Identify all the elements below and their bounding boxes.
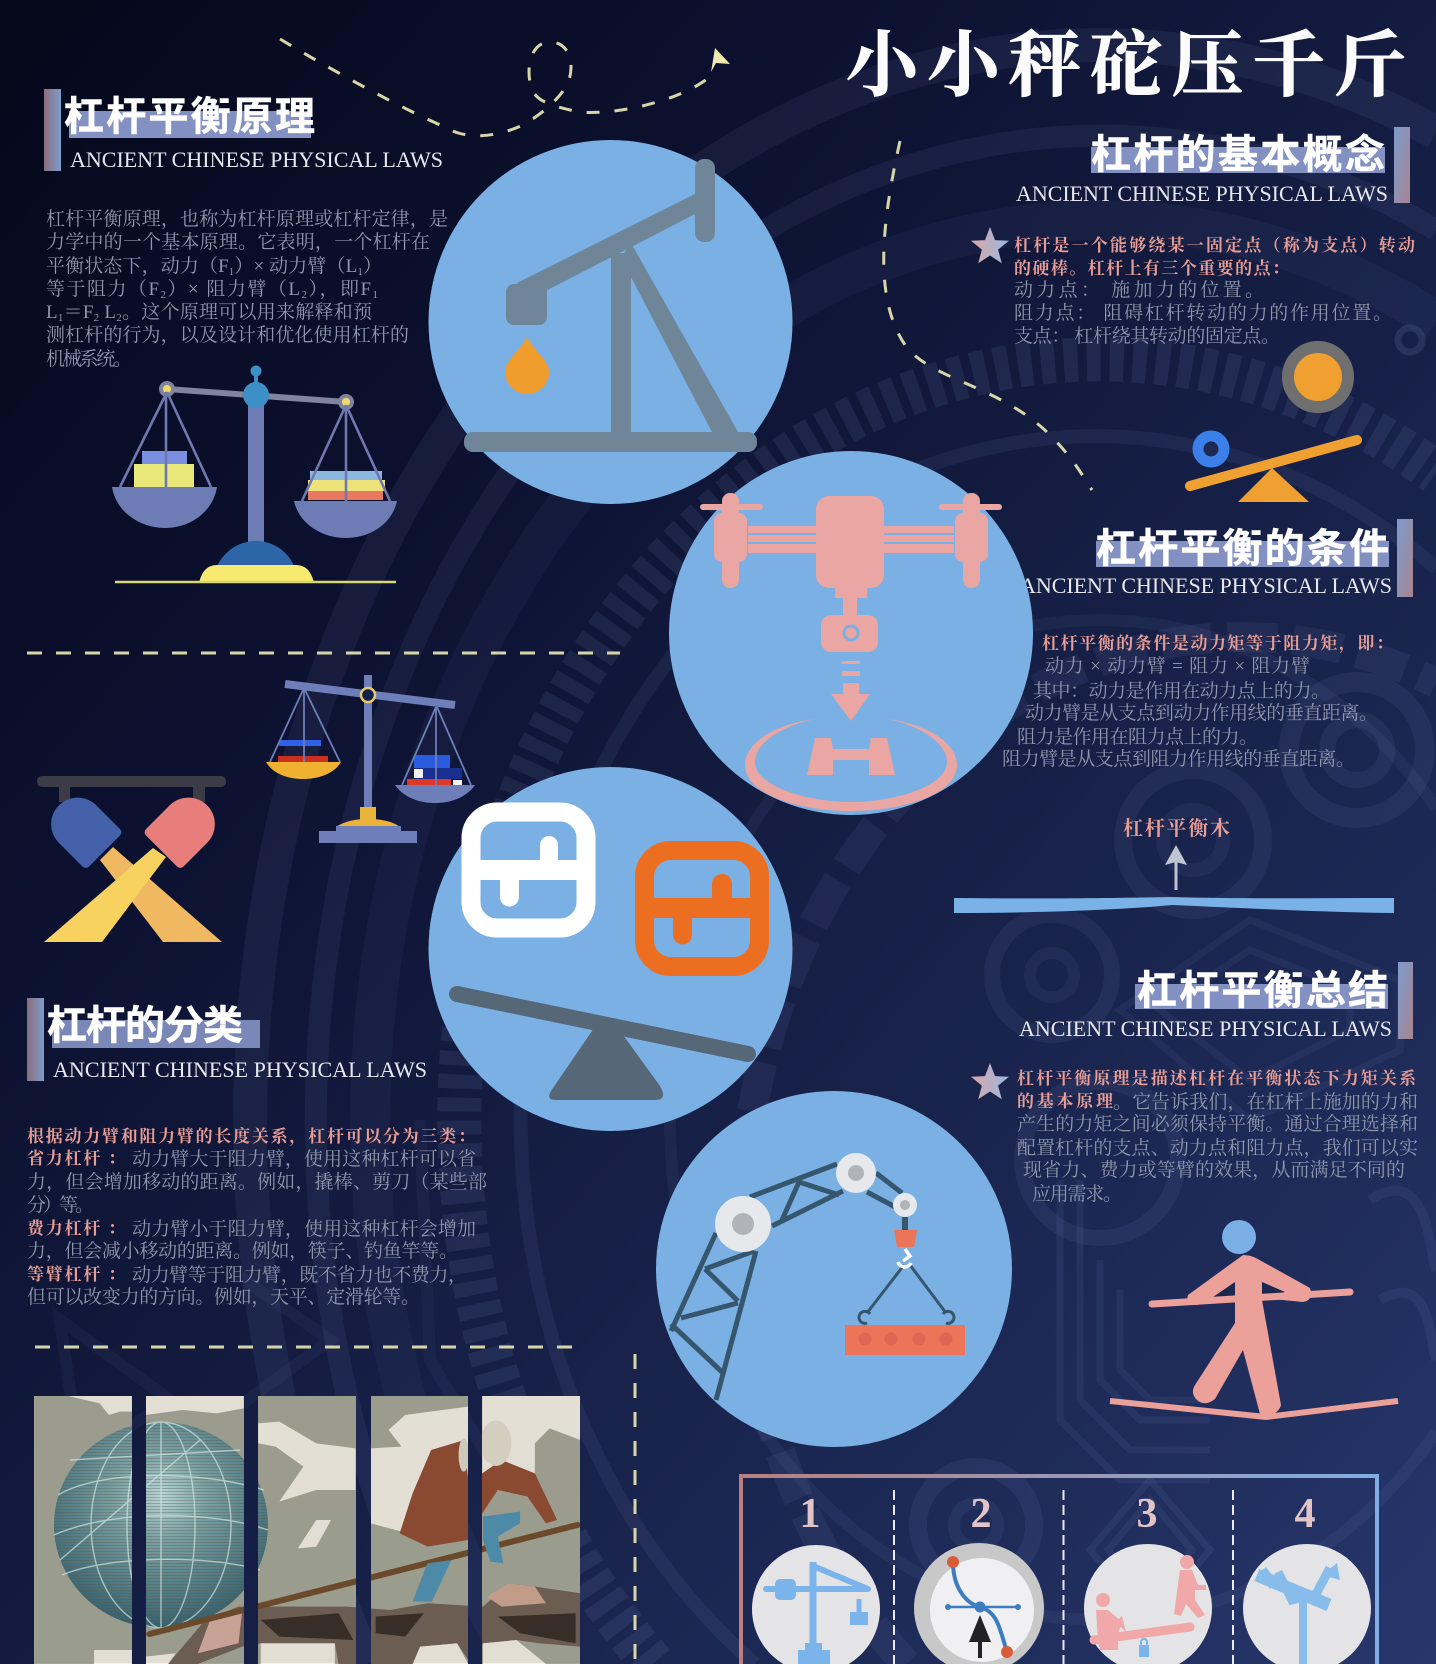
icon: balance scale — [112, 366, 397, 583]
body text: 现省力、费力或等臂的效果，从而满足不同的 — [1023, 1159, 1405, 1181]
clouds — [68, 1396, 580, 1664]
circle: seesaw with boxes — [428, 767, 792, 1131]
icon: bezier curve cursor — [914, 1543, 1044, 1664]
heading: 杠杆平衡原理 — [64, 95, 315, 139]
body text: ）× 阻力臂（L — [168, 278, 300, 300]
coat — [400, 1440, 557, 1547]
icon: tightrope walker — [1110, 1220, 1398, 1417]
body text: 1 — [372, 289, 378, 301]
panel: balance summary — [971, 962, 1418, 1417]
rocks — [168, 1583, 580, 1664]
body text: 1 — [58, 312, 63, 324]
body text: ＝F — [64, 302, 93, 323]
heading highlight — [52, 1020, 260, 1048]
panel: lever types — [27, 998, 487, 1308]
legs — [413, 1560, 452, 1602]
panel: balance condition — [954, 519, 1413, 913]
icon: tilted scale — [266, 675, 475, 843]
heading accent bar — [1397, 519, 1413, 597]
heading: 杠杆的基本概念 — [1091, 133, 1385, 177]
body text: 动力点： 施加力的位置。 — [1014, 279, 1264, 301]
numbers: 1 — [800, 1491, 820, 1537]
wig — [459, 1438, 469, 1472]
body text: L — [46, 302, 58, 323]
icon: orange box — [644, 850, 760, 966]
subtitle: ANCIENT CHINESE PHYSICAL LAWS — [1019, 1016, 1392, 1041]
body text: 杠杆是一个能够绕某一固定点（称为支点）转动 — [1014, 235, 1415, 255]
body text: ）× 动力臂（L — [234, 255, 357, 277]
icon: star — [971, 1063, 1009, 1099]
icon: white box — [471, 812, 586, 928]
body text: L — [99, 302, 116, 323]
body text: 的基本原理 — [1017, 1092, 1113, 1111]
body text — [1002, 633, 1393, 770]
icon: drone and helipad — [700, 493, 1002, 811]
globe — [54, 1422, 268, 1628]
body text: 费力杠杆 ： — [27, 1218, 125, 1238]
main title: 小小秤砣压千斤 — [846, 26, 1406, 106]
body text: ），即F — [308, 278, 371, 300]
numbers: 4 — [1294, 1491, 1316, 1537]
icon: crane lifting block — [671, 1153, 965, 1400]
icon: pump jack — [464, 159, 757, 452]
body text — [1017, 1068, 1418, 1205]
divider dashes — [27, 653, 635, 1664]
heading highlight — [1135, 984, 1388, 1009]
heading highlight — [1096, 541, 1389, 567]
body text: 力，但会增加移动的距离。例如，撬棒、剪刀（某些部 — [27, 1171, 487, 1193]
body text: 平衡状态下，动力（F — [46, 256, 229, 277]
body text: 配置杠杆的支点、动力点和阻力点，我们可以实 — [1017, 1137, 1418, 1159]
subtitle: ANCIENT CHINESE PHYSICAL LAWS — [53, 1057, 427, 1082]
dashed flight path with arrow — [280, 39, 730, 136]
icon: seesaw with ball — [1190, 347, 1357, 502]
subtitle: ANCIENT CHINESE PHYSICAL LAWS — [70, 147, 443, 172]
circle: drone — [669, 451, 1033, 815]
body text: 阻力臂是从支点到阻力作用线的垂直距离。 — [1002, 748, 1355, 770]
heading accent bar — [1394, 127, 1410, 203]
numbers — [800, 1491, 1316, 1537]
body text: 其中：动力是作用在动力点上的力。 — [1033, 680, 1330, 702]
body text: 力学中的一个基本原理。它表明，一个杠杆在 — [46, 231, 430, 253]
icon: tower crane — [752, 1545, 880, 1664]
body text — [1014, 235, 1415, 347]
body text: 根据动力臂和阻力臂的长度关系，杠杆可以分为三类： — [27, 1126, 475, 1147]
body text: 阻力点： 阻碍杠杆转动的力的作用位置。 — [1014, 302, 1392, 324]
icon: crossed shovels — [37, 776, 226, 942]
arrow — [1165, 845, 1187, 890]
numbers: 3 — [1136, 1491, 1158, 1537]
body text: 1 — [229, 266, 234, 278]
body text: 动力臂是从支点到动力作用线的垂直距离。 — [1025, 702, 1378, 724]
heading accent bar — [44, 89, 61, 171]
body text: 。它告诉我们，在杠杆上施加的力和 — [1113, 1091, 1418, 1113]
dashed separators — [894, 1490, 1233, 1664]
heading: 杠杆的分类 — [47, 1004, 243, 1048]
lever beam — [150, 1525, 577, 1634]
heading accent bar — [27, 998, 44, 1081]
subtitle: ANCIENT CHINESE PHYSICAL LAWS — [1020, 573, 1392, 598]
body text: 等臂杠杆 ： — [27, 1264, 125, 1284]
numbers: 2 — [970, 1491, 992, 1537]
image: Archimedes moving the earth, cut into five strips — [34, 1396, 581, 1664]
heading highlight — [69, 111, 311, 138]
panel: lever basic concept — [971, 127, 1415, 502]
body text: ） — [363, 255, 382, 277]
body text: 2 — [94, 312, 99, 324]
body text: 动力臂大于阻力臂，使用这种杠杆可以省 — [132, 1148, 476, 1170]
body text: 2 — [161, 289, 166, 301]
body text: 动力臂小于阻力臂，使用这种杠杆会增加 — [132, 1218, 476, 1240]
heading accent bar — [1398, 962, 1413, 1039]
balance beam — [954, 897, 1394, 913]
body text: 动力 × 动力臂 = 阻力 × 阻力臂 — [1045, 655, 1310, 677]
body text: 1 — [357, 266, 363, 278]
body text: 杠杆平衡的条件是动力矩等于阻力矩，即： — [1042, 633, 1393, 654]
subtitle: ANCIENT CHINESE PHYSICAL LAWS — [1016, 181, 1388, 206]
body text: 但可以改变力的方向。例如，天平、定滑轮等。 — [27, 1286, 420, 1308]
body text: 杠杆平衡原理，也称为杠杆原理或杠杆定律，是 — [46, 208, 448, 230]
icon: weather vane — [1243, 1544, 1371, 1664]
label: balance beam: 杠杆平衡木 — [1123, 817, 1230, 840]
heading: 杠杆平衡的条件 — [1096, 527, 1389, 571]
body text: 阻力是作用在阻力点上的力。 — [1017, 726, 1258, 748]
body text: 2 — [301, 289, 307, 301]
body text: 。这个原理可以用来解释和预 — [122, 301, 372, 323]
panel: four applications — [741, 1476, 1377, 1664]
heading: 杠杆平衡总结 — [1137, 969, 1388, 1013]
body text: 测杠杆的行为，以及设计和优化使用杠杆的 — [46, 324, 409, 346]
body text — [46, 208, 448, 370]
body text: 的硬棒。杠杆上有三个重要的点： — [1014, 258, 1289, 278]
body text: 动力臂等于阻力臂，既不省力也不费力， — [132, 1264, 467, 1286]
body text: 分）等。 — [27, 1194, 94, 1216]
heading highlight — [1091, 147, 1385, 173]
body text: 力，但会减小移动的距离。例如，筷子、钓鱼竿等。 — [27, 1240, 458, 1262]
body text: 机械系统。 — [46, 348, 132, 370]
body text — [27, 1126, 487, 1308]
body text: 应用需求。 — [1032, 1183, 1122, 1205]
icon: seesaw — [457, 994, 748, 1100]
icon: children on seesaw — [1084, 1544, 1212, 1664]
body text: 2 — [116, 312, 122, 324]
circle: crane — [656, 1091, 1012, 1447]
body text: 产生的力矩之间必须保持平衡。通过合理选择和 — [1017, 1113, 1418, 1135]
icon: oil drop — [505, 337, 549, 394]
body text: 等于阻力（F — [46, 279, 159, 300]
gradient frame — [741, 1476, 1377, 1664]
body text: 杠杆平衡原理是描述杠杆在平衡状态下力矩关系 — [1017, 1068, 1417, 1088]
body text: 支点： 杠杆绕其转动的固定点。 — [1014, 325, 1280, 347]
dashed curve right — [884, 141, 1092, 490]
panel: lever balance principle — [44, 89, 448, 583]
body text: 省力杠杆 ： — [27, 1148, 125, 1168]
icon: star — [971, 227, 1009, 263]
circle: oil pump — [428, 140, 792, 504]
